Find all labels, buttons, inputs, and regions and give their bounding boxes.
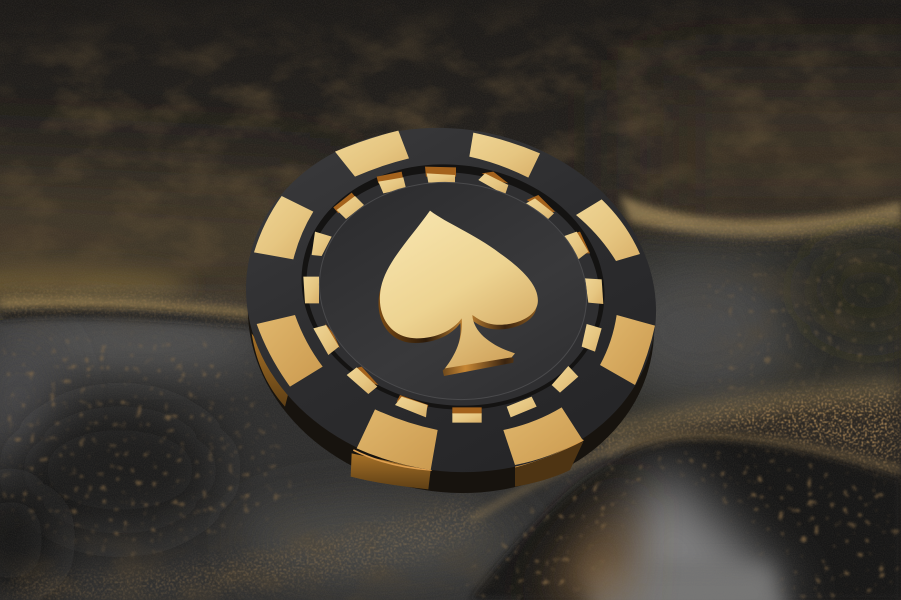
side gold stripes (252, 333, 583, 489)
chip face (218, 96, 684, 504)
spade bevel (379, 215, 537, 376)
lower right wave: dark crest with light reflection (470, 388, 901, 600)
inner disc (305, 165, 601, 417)
right wave: mid grey slope (600, 222, 901, 450)
ring dashes: gold (303, 167, 603, 423)
outer gold segments (254, 131, 655, 470)
top haze: brown-gold dust glow (0, 90, 901, 305)
poker chip (218, 96, 684, 525)
spade face (380, 211, 538, 368)
chip side: extruded edge (220, 113, 682, 525)
inner ring groove (286, 145, 620, 429)
left ridge: dark dusty crest line (0, 298, 255, 327)
icon: gold spade (379, 211, 538, 376)
lower wave: grey satin sheen (0, 312, 640, 600)
